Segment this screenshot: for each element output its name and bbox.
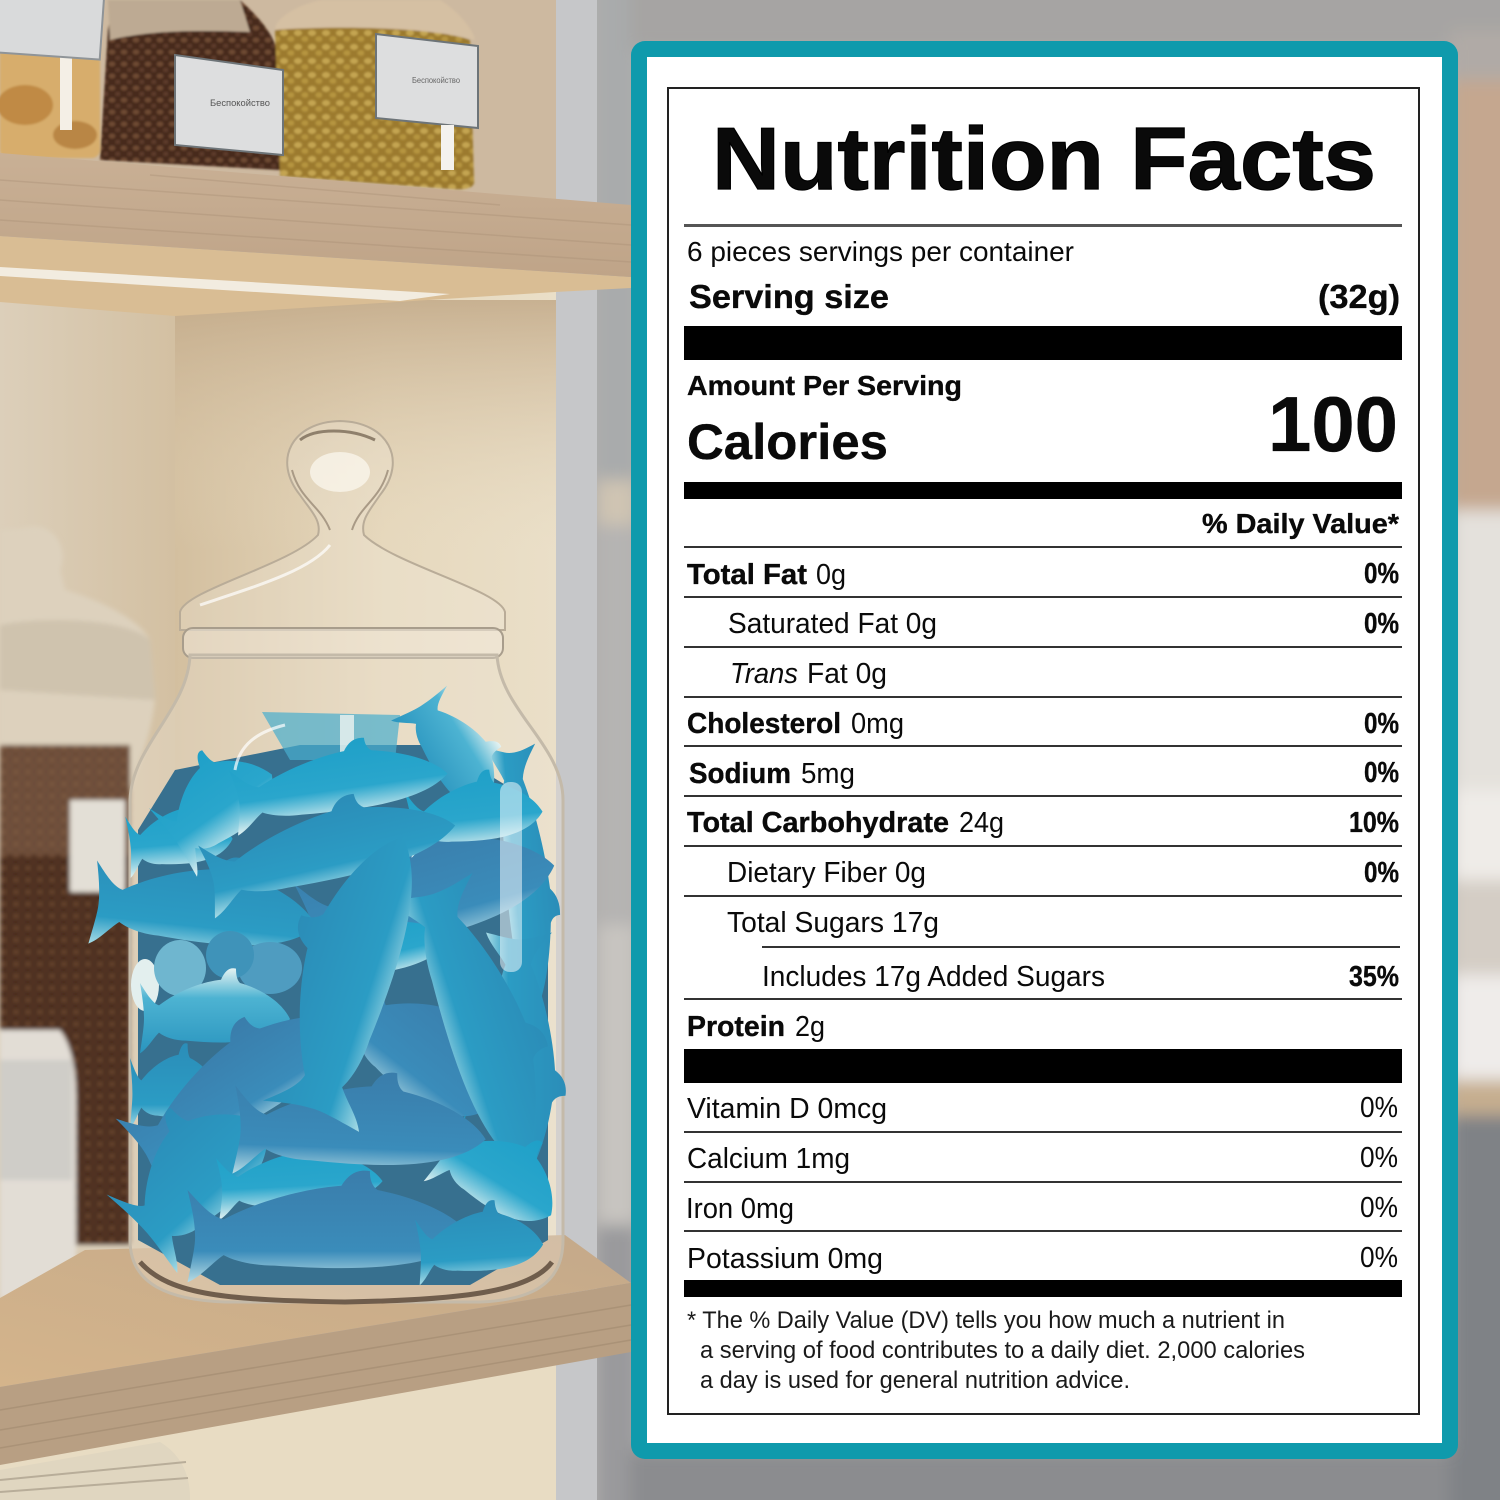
row: dietary fiber: 0% — [1364, 857, 1399, 889]
row: vitamin d — [687, 1092, 1398, 1125]
footnote: a serving of food contributes to a daily diet. 2,000 calories — [700, 1337, 1305, 1364]
row: saturated fat — [728, 608, 1399, 640]
title: Nutrition Facts — [712, 109, 1376, 208]
row: protein: 2g — [795, 1011, 825, 1043]
serving size: Serving size — [689, 278, 889, 315]
upper alcove wall — [0, 0, 557, 220]
row: sodium: 5mg — [801, 758, 855, 790]
cabinet post — [556, 0, 597, 1500]
amount per serving: Amount Per Serving — [687, 370, 962, 401]
calories — [687, 380, 1398, 470]
row: total fat: 0% — [1364, 558, 1399, 590]
jar lid — [180, 421, 505, 658]
row: trans fat: Fat 0g — [807, 658, 887, 690]
row: potassium: 0% — [1360, 1242, 1398, 1274]
row: iron: Iron 0mg — [686, 1193, 794, 1225]
row: sodium — [689, 757, 1399, 790]
row: vitamin d: 0% — [1360, 1092, 1398, 1124]
blurred jars at left — [0, 526, 155, 1298]
shelf: lower — [0, 1235, 631, 1500]
row: trans fat — [730, 658, 887, 690]
rules and bars — [684, 224, 1402, 1297]
row: cholesterol: 0% — [1364, 708, 1399, 740]
row: trans fat: Trans — [730, 658, 798, 690]
row: dietary fiber: Dietary Fiber 0g — [727, 857, 926, 889]
row: calcium: Calcium 1mg — [687, 1143, 850, 1175]
glass jar of shark gummies — [88, 421, 581, 1302]
row: dietary fiber — [727, 857, 1399, 889]
row: total sugars: Total Sugars 17g — [727, 907, 939, 939]
white panel — [647, 57, 1442, 1443]
servings per container: 6 pieces servings per container — [687, 236, 1074, 267]
footnote: a day is used for general nutrition advice. — [700, 1367, 1130, 1394]
left wall — [0, 280, 175, 1320]
jar body — [130, 655, 563, 1302]
row: cholesterol: 0mg — [851, 708, 904, 740]
row: iron — [686, 1192, 1398, 1225]
footnote: * The % Daily Value (DV) tells you how much a nutrient in — [687, 1307, 1285, 1334]
row: total fat — [687, 558, 1399, 591]
daily value heading: % Daily Value* — [1202, 508, 1399, 539]
jars top shelf: Беспокойство — [412, 76, 461, 85]
teal panel — [631, 41, 1458, 1459]
row: protein: Protein — [687, 1011, 785, 1043]
row: added sugars: 35% — [1349, 961, 1399, 993]
calories: Calories — [687, 414, 888, 470]
row: calcium — [687, 1142, 1398, 1175]
jar base and highlights — [140, 725, 552, 1302]
row: sodium: Sodium — [689, 758, 791, 790]
row: total carbohydrate — [687, 807, 1399, 839]
footnote — [687, 1307, 1305, 1394]
row: total carbohydrate: 10% — [1349, 807, 1399, 839]
row: cholesterol: Cholesterol — [687, 708, 841, 740]
row: potassium: Potassium 0mg — [687, 1243, 883, 1275]
row: calcium: 0% — [1360, 1142, 1398, 1174]
lower cabinet back — [0, 1340, 557, 1500]
serving size: (32g) — [1318, 278, 1400, 315]
serving size — [689, 278, 1400, 315]
row: saturated fat: Saturated Fat 0g — [728, 608, 937, 640]
faint reflection — [262, 712, 400, 760]
row: cholesterol — [687, 708, 1399, 740]
nutrition facts label — [668, 88, 1419, 1414]
jars top shelf: Беспокойство — [210, 98, 270, 108]
row: added sugars: Includes 17g Added Sugars — [762, 961, 1105, 993]
row: total carbohydrate: 24g — [959, 807, 1004, 839]
row: potassium — [687, 1242, 1398, 1275]
row: total carbohydrate: Total Carbohydrate — [687, 807, 949, 839]
row: total fat: 0g — [816, 559, 846, 591]
row: sodium: 0% — [1364, 757, 1399, 789]
wall shade — [175, 300, 557, 800]
shelf: upper — [0, 153, 631, 316]
calories: 100 — [1268, 380, 1398, 468]
jars top shelf — [0, 0, 478, 189]
label frame — [668, 88, 1419, 1414]
row: saturated fat: 0% — [1364, 608, 1399, 640]
row: total fat: Total Fat — [687, 559, 807, 591]
sharks fill — [88, 678, 581, 1285]
rear wall — [175, 280, 557, 1280]
row: vitamin d: Vitamin D 0mcg — [687, 1093, 887, 1125]
row: iron: 0% — [1360, 1192, 1398, 1224]
row: added sugars — [762, 961, 1399, 993]
